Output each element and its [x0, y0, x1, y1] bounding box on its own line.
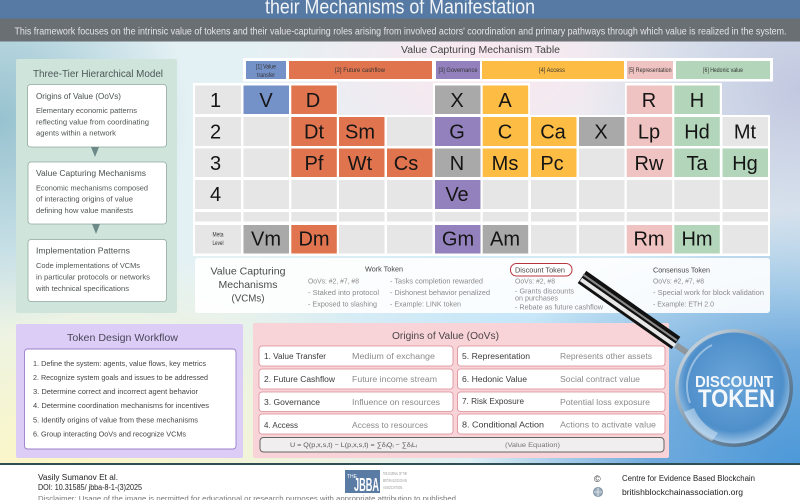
row 2: X — [594, 122, 608, 144]
tier: value capturing mechanisms — [28, 162, 166, 224]
logo: JBBA: ASSOCIATION. — [383, 485, 403, 490]
value equation — [260, 438, 664, 452]
citation: DOI: 10.31585/ jbba-8-1-(3)2025 — [38, 483, 142, 492]
icon: globe with website line: britishblockchainassociation.org — [622, 488, 743, 497]
footer — [0, 463, 800, 500]
lens label: DISCOUNT — [695, 374, 773, 391]
oov 5 — [458, 346, 665, 366]
table column headers: [6] Hedonic value — [703, 68, 744, 74]
magnifier handle — [581, 274, 689, 354]
work token: - Dishonest behavior penalized — [390, 290, 490, 297]
oov 6 — [458, 369, 665, 389]
workflow steps: 5. Identify origins of value from these mechanisms — [33, 418, 199, 424]
consensus token: - Special work for block validation — [653, 290, 764, 297]
value equation: U = Q(p,x,s,t) − L(p,x,s,t) = ∑δᵢQᵢ − ∑δᵢLᵢ — [290, 442, 417, 449]
discount token: - Grants discounts — [515, 288, 575, 296]
vcm heading: Value Capturing — [210, 266, 286, 278]
oov 1: Medium of exchange — [352, 352, 436, 361]
table column headers: [5] Representation — [628, 68, 672, 74]
work token: - Tasks completion rewarded — [390, 278, 483, 286]
meta level row: Rm — [633, 228, 665, 250]
spacer row — [195, 212, 768, 222]
tier: implementation patterns: with technical specifications — [35, 286, 130, 293]
table heading: Value Capturing Mechanism Table — [401, 45, 560, 56]
panel heading: Three-Tier Hierarchical Model — [33, 69, 163, 80]
oov 3: 3. Governance — [264, 398, 321, 407]
row 2: Dt — [304, 122, 324, 144]
oov 8 — [458, 414, 665, 434]
oov 6: 6. Hedonic Value — [462, 375, 528, 384]
panel: value capturing mechanisms — [195, 258, 770, 313]
tier: origins of value: agents within a network — [36, 130, 117, 138]
row 4: Ve — [445, 184, 469, 206]
consensus token: Consensus Token — [653, 268, 710, 274]
oov 1 — [259, 346, 453, 366]
oov 6: Social contract value — [560, 375, 641, 384]
row 1: D — [306, 90, 320, 112]
work token: Work Token — [365, 266, 403, 274]
tier: implementation patterns: in particular protocols or networks — [36, 274, 151, 282]
work token: OoVs: #2, #7, #8 — [308, 278, 359, 286]
meta level row: Meta — [212, 232, 224, 238]
mechanism table grid — [193, 83, 770, 256]
row 2: Hd — [684, 122, 710, 144]
logo: JBBA: THE — [347, 474, 358, 480]
oov 4 — [259, 414, 453, 434]
work token: - Exposed to slashing — [308, 302, 377, 308]
table column headers: transfer — [257, 73, 275, 79]
work token: - Example: LINK token — [390, 302, 461, 308]
panel: three-tier hierarchical model — [16, 59, 177, 313]
oov 8: 8. Conditional Action — [462, 420, 544, 430]
row 3: 3 — [210, 153, 221, 175]
logo: JBBA — [345, 470, 407, 495]
row 4 — [195, 180, 768, 209]
meta level row: Vm — [251, 228, 281, 250]
discount token: OoVs: #2, #8 — [515, 278, 555, 286]
oov 4: Access to resources — [352, 421, 428, 430]
workflow steps: 6. Group interacting OoVs and recognize VCMs — [33, 432, 187, 438]
consensus token: OoVs: #2, #7, #8 — [653, 278, 704, 286]
panel: origins of value — [253, 323, 669, 458]
table column headers: [1] Value — [256, 64, 277, 70]
logo: JBBA: JBBA — [354, 475, 379, 495]
row 2: C — [498, 122, 512, 144]
oov 3 — [259, 392, 453, 412]
table column headers: [2] Future cashflow — [335, 68, 386, 74]
work token: - Staked into protocol — [308, 290, 379, 297]
row 3: Ms — [492, 153, 518, 175]
row 3: Hg — [732, 153, 758, 175]
tier: value capturing mechanisms: of interacting origins of value — [36, 196, 133, 204]
discount token: - Rebate as future cashflow — [515, 304, 604, 312]
row 2: 2 — [210, 122, 221, 144]
meta level row: Dm — [298, 228, 330, 250]
header banner — [0, 0, 800, 18]
row 4: 4 — [210, 184, 221, 206]
magnifier lens: TOKEN — [698, 385, 775, 413]
discount token — [510, 264, 604, 312]
row 1: R — [642, 90, 656, 112]
row 1: 1 — [210, 90, 221, 112]
row 2 — [195, 117, 768, 146]
row 3: Ta — [686, 153, 708, 175]
consensus token: - Example: ETH 2.0 — [653, 302, 714, 308]
row 1 — [195, 86, 720, 114]
row 3: Rw — [635, 153, 664, 175]
row 1: V — [259, 90, 273, 112]
footer: BRITISH BLOCKCHAIN — [383, 478, 407, 483]
tier: implementation patterns — [28, 240, 166, 302]
footer: THE JOURNAL OF THE — [383, 471, 407, 476]
magnifier lens — [675, 329, 793, 447]
row 3: Wt — [348, 153, 373, 175]
table column headers: [4] Access — [539, 68, 565, 74]
workflow heading: Token Design Workflow — [67, 332, 178, 344]
tier: origins of value: reflecting value from coordinating — [36, 120, 149, 126]
workflow steps: 4. Determine coordination mechanisms for incentives — [33, 403, 210, 410]
oov 4: 4. Access — [264, 421, 298, 430]
tier: implementation patterns: Code implementations of VCMs — [36, 263, 141, 270]
row 2: Lp — [638, 122, 660, 144]
citation — [38, 473, 456, 500]
meta level row: Gm — [442, 228, 474, 250]
row 3: Cs — [394, 153, 418, 175]
workflow steps: 3. Determine correct and incorrect agent behavior — [33, 389, 199, 396]
oov 2: Future income stream — [352, 375, 437, 384]
oov 2: 2. Future Cashflow — [264, 375, 335, 384]
row 1: A — [498, 90, 512, 112]
tier: value capturing mechanisms: Economic mechanisms composed — [36, 186, 148, 192]
discount token: on purchases — [515, 296, 559, 302]
oov 5: Represents other assets — [560, 352, 652, 361]
panel: token design workflow — [16, 324, 243, 458]
oov 7 — [458, 392, 665, 412]
arrow: down to implementation — [92, 224, 100, 234]
workflow steps — [24, 349, 236, 449]
workflow steps: 1. Define the system: agents, value flows, key metrics — [33, 361, 207, 368]
row 1: X — [450, 90, 464, 112]
oov 3: Influence on resources — [352, 398, 440, 407]
oov 5: 5. Representation — [462, 352, 530, 361]
row 3: Pf — [305, 153, 324, 175]
oov 1: 1. Value Transfer — [264, 352, 326, 361]
citation: Vasily Sumanov Et al. — [38, 473, 118, 482]
row 1: H — [690, 90, 704, 112]
meta level row: Hm — [681, 228, 713, 250]
value equation: (Value Equation) — [505, 442, 560, 449]
tier: value capturing mechanisms: defining how value manifests — [36, 208, 134, 215]
oov 8: Actions to activate value — [560, 420, 657, 430]
meta level row — [195, 225, 768, 254]
oov heading: Origins of Value (OoVs) — [392, 330, 499, 342]
copyright line: Centre for Evidence Based Blockchain — [622, 474, 755, 483]
discount token: Discount Token — [515, 268, 565, 274]
icon: magnifying glass — [581, 274, 793, 447]
tier: origins of value — [28, 84, 166, 147]
tier: implementation patterns: Implementation Patterns — [36, 246, 130, 256]
work token — [308, 266, 490, 308]
vcm heading — [210, 266, 286, 304]
copyright line: © — [594, 474, 601, 484]
row 2: Sm — [345, 122, 375, 144]
table column headers: [3] Governance — [438, 68, 478, 74]
row 2: G — [449, 122, 465, 144]
oov 7: Potential loss exposure — [560, 398, 651, 407]
vcm heading: (VCMs) — [232, 292, 264, 304]
row 2: Mt — [734, 122, 757, 144]
tier: value capturing mechanisms: Value Capturing Mechanisms — [36, 169, 146, 178]
table column headers — [243, 58, 773, 82]
consensus token — [653, 268, 764, 308]
tier: origins of value: Origins of Value (OoVs) — [36, 92, 121, 101]
meta level row: Level — [212, 241, 224, 247]
row 3 — [195, 148, 768, 177]
subtitle band — [0, 18, 800, 42]
row 2: Ca — [540, 122, 567, 144]
vcm heading: Mechanisms — [218, 279, 278, 291]
row 3: N — [450, 153, 464, 175]
meta level row: Am — [490, 228, 520, 250]
workflow steps: 2. Recognize system goals and issues to be addressed — [33, 375, 208, 382]
oov 7: 7. Risk Exposure — [462, 397, 525, 406]
row 3: Pc — [540, 153, 564, 175]
tier: origins of value: Elementary economic patterns — [36, 108, 138, 115]
oov 2 — [259, 369, 453, 389]
arrow: down to mechanisms — [91, 147, 99, 157]
